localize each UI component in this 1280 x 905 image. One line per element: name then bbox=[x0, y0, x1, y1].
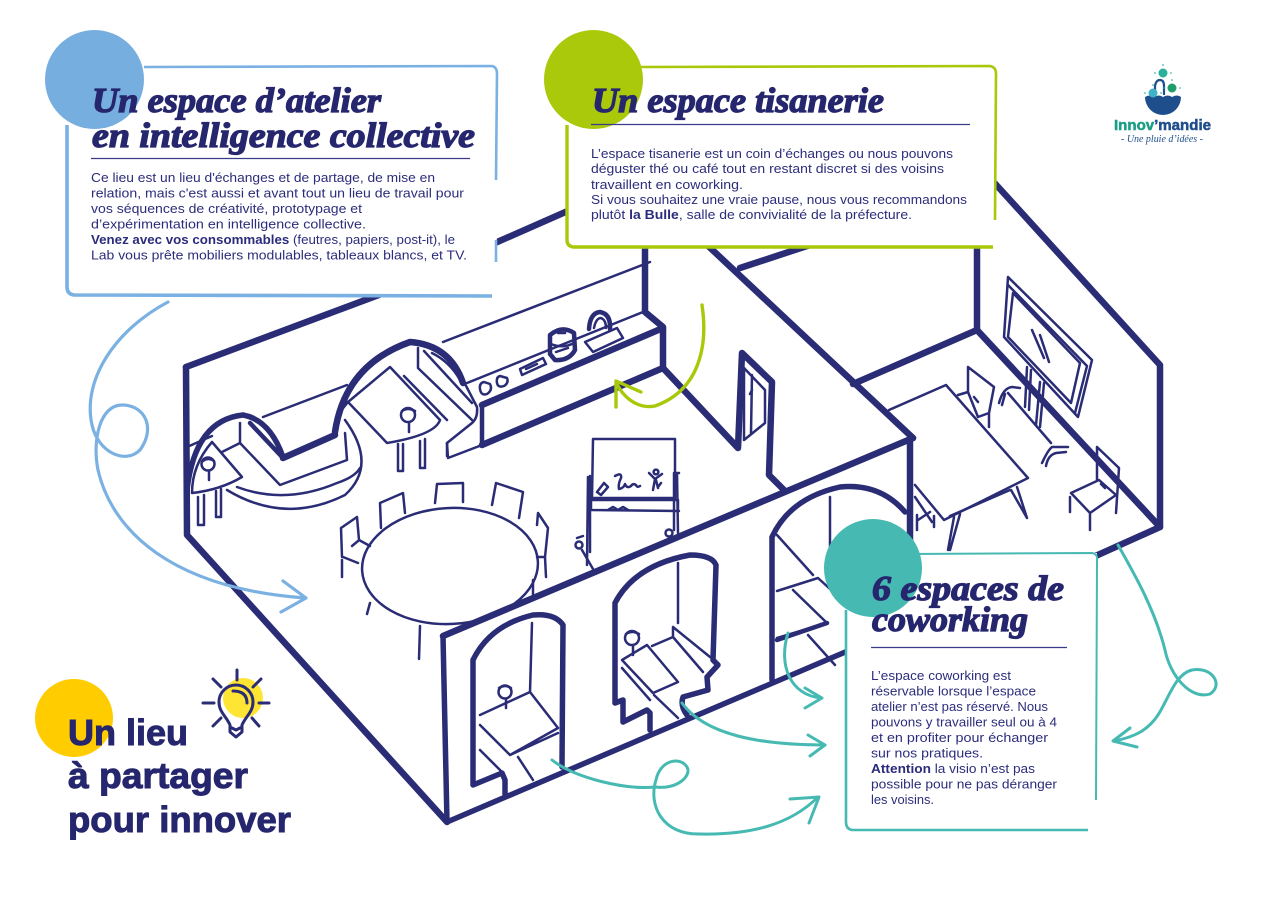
door bbox=[744, 368, 765, 440]
heading: en intelligence collective bbox=[92, 116, 475, 155]
body text: déguster thé ou café tout en restant discret si des voisins bbox=[591, 161, 945, 176]
logo: Innov'mandie: - Une pluie d’idées - bbox=[1121, 134, 1203, 145]
body text: les voisins. bbox=[871, 792, 934, 807]
colored circle bbox=[45, 30, 144, 129]
arrow from booth 3 bbox=[785, 633, 822, 708]
heading: Un espace d’atelier bbox=[92, 81, 381, 120]
tisanerie counter bbox=[443, 262, 663, 458]
body text: réservable lorsque l’espace bbox=[871, 684, 1036, 698]
body text: Lab vous prête mobiliers modulables, tableaux blancs, et TV. bbox=[91, 248, 467, 262]
heading: 6 espaces de bbox=[872, 569, 1064, 608]
main title with yellow circle: à partager bbox=[68, 755, 248, 796]
body text: vos séquences de créativité, prototypage et bbox=[91, 201, 362, 216]
logo: Innov'mandie bbox=[1114, 64, 1211, 145]
arrow from booth 1 with loop bbox=[552, 760, 819, 834]
body text: L’espace coworking est bbox=[871, 668, 1011, 683]
heading bbox=[92, 81, 475, 155]
body text: Attention la visio n’est pas bbox=[871, 761, 1036, 776]
body text bbox=[591, 146, 968, 222]
front wall with booths bbox=[443, 438, 913, 822]
arrow from booth 2 bbox=[682, 703, 825, 756]
body text: relation, mais c'est aussi et avant tout un lieu de travail pour bbox=[91, 186, 465, 200]
panel: tisanerie bbox=[544, 30, 996, 247]
body text: pouvons y travailler seul ou à 4 bbox=[871, 714, 1057, 730]
body text: sur nos pratiques. bbox=[871, 746, 983, 760]
body text: Venez avec vos consommables (feutres, papiers, post-it), le bbox=[91, 232, 455, 247]
body text bbox=[91, 170, 467, 262]
round meeting table and chairs bbox=[341, 483, 548, 659]
colored circle bbox=[544, 30, 643, 129]
colored circle bbox=[824, 519, 922, 617]
body text: et en profiter pour échanger bbox=[871, 730, 1049, 745]
arrow: blue, to workshop space bbox=[90, 302, 306, 612]
bench with arch, left bbox=[187, 385, 362, 525]
icon: light bulb bbox=[203, 670, 269, 737]
body text: Ce lieu est un lieu d'échanges et de partage, de mise en bbox=[91, 170, 435, 185]
arrows: teal, to coworking panel bbox=[552, 545, 1216, 834]
bench with arch, right bbox=[335, 342, 472, 471]
panel: coworking bbox=[824, 519, 1097, 830]
illustration: isometric floor plan bbox=[186, 178, 1160, 822]
back and outer walls bbox=[186, 178, 1160, 822]
arrow from meeting room with loop bbox=[1113, 545, 1216, 747]
main title with yellow circle: pour innover bbox=[68, 799, 291, 840]
body text: plutôt la Bulle , salle de convivialité de la préfecture. bbox=[591, 207, 912, 222]
icon: umbrella bbox=[1144, 64, 1181, 115]
booth 1 bbox=[473, 615, 563, 794]
body text: travaillent en coworking. bbox=[591, 177, 743, 192]
main title with yellow circle bbox=[35, 679, 291, 840]
booth 3 bbox=[772, 487, 905, 680]
body text: atelier n’est pas réservé. Nous bbox=[871, 699, 1048, 714]
meeting room: screen, table and chairs bbox=[889, 277, 1119, 550]
heading: coworking bbox=[872, 600, 1028, 639]
panel: workshop space bbox=[45, 30, 497, 296]
arrow: green, to tisanerie bbox=[616, 305, 704, 407]
heading: Un espace tisanerie bbox=[592, 81, 884, 120]
body text: d’expérimentation en intelligence collective. bbox=[91, 216, 366, 232]
body text: possible pour ne pas déranger bbox=[871, 776, 1058, 792]
whiteboard bbox=[576, 439, 679, 569]
booth 2 bbox=[615, 555, 718, 730]
body text: Si vous souhaitez une vraie pause, nous vous recommandons bbox=[591, 192, 968, 207]
heading bbox=[872, 569, 1064, 639]
main title with yellow circle: Un lieu bbox=[68, 712, 188, 753]
logo: Innov'mandie: Innov’mandie bbox=[1114, 117, 1211, 134]
body text: L’espace tisanerie est un coin d’échanges ou nous pouvons bbox=[591, 146, 954, 161]
body text bbox=[871, 668, 1058, 807]
